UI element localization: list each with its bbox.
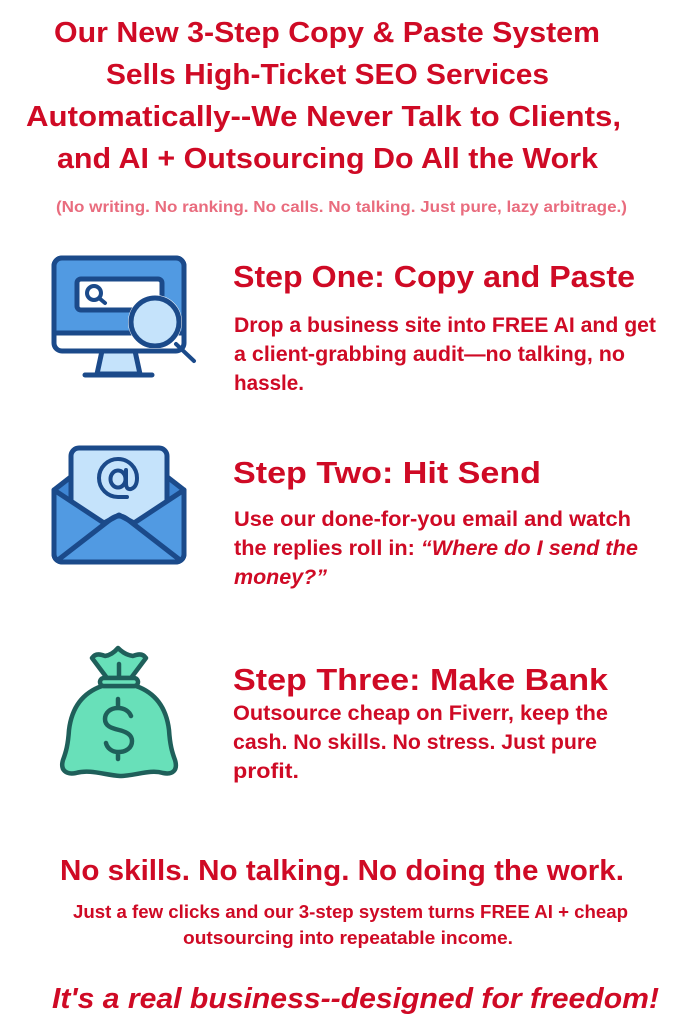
icon: monitor with magnifying glass [54, 258, 194, 375]
step two heading: Step Two: Hit Send [233, 455, 541, 490]
step three text [233, 702, 608, 783]
closing tagline: It's a real business--designed for freedom! [52, 983, 659, 1015]
subtitle: (No writing. No ranking. No calls. No talking. Just pure, lazy arbitrage.) [56, 199, 627, 216]
step three text: Outsource cheap on Fiverr, keep the [233, 702, 608, 725]
step three text: profit. [233, 760, 299, 783]
closing text: outsourcing into repeatable income. [183, 928, 513, 948]
closing heading: No skills. No talking. No doing the work. [60, 855, 624, 887]
step one text: Drop a business site into FREE AI and get [234, 314, 656, 337]
title: and AI + Outsourcing Do All the Work [57, 143, 599, 175]
step two text: money?” [234, 566, 328, 589]
step three heading: Step Three: Make Bank [233, 662, 609, 697]
step one text: a client-grabbing audit—no talking, no [234, 343, 625, 366]
step one heading: Step One: Copy and Paste [233, 259, 635, 294]
step one text: hassle. [234, 372, 304, 395]
step two text: the replies roll in: “Where do I send the [234, 537, 638, 560]
closing text: Just a few clicks and our 3-step system turns FREE AI + cheap [73, 902, 628, 922]
title: Our New 3-Step Copy & Paste System [54, 17, 600, 49]
closing text [73, 902, 628, 948]
step two text: Use our done-for-you email and watch [234, 508, 631, 531]
icon: money bag [62, 648, 176, 776]
title: Automatically--We Never Talk to Clients, [26, 101, 621, 133]
panel: step one [54, 258, 656, 395]
panel: step two [54, 448, 638, 589]
icon: envelope with at sign [54, 448, 184, 562]
step one text [234, 314, 656, 395]
title: Sells High-Ticket SEO Services [106, 59, 549, 91]
title [26, 17, 621, 175]
step three text: cash. No skills. No stress. Just pure [233, 731, 597, 754]
step two text [234, 508, 638, 589]
panel: step three [62, 648, 609, 783]
